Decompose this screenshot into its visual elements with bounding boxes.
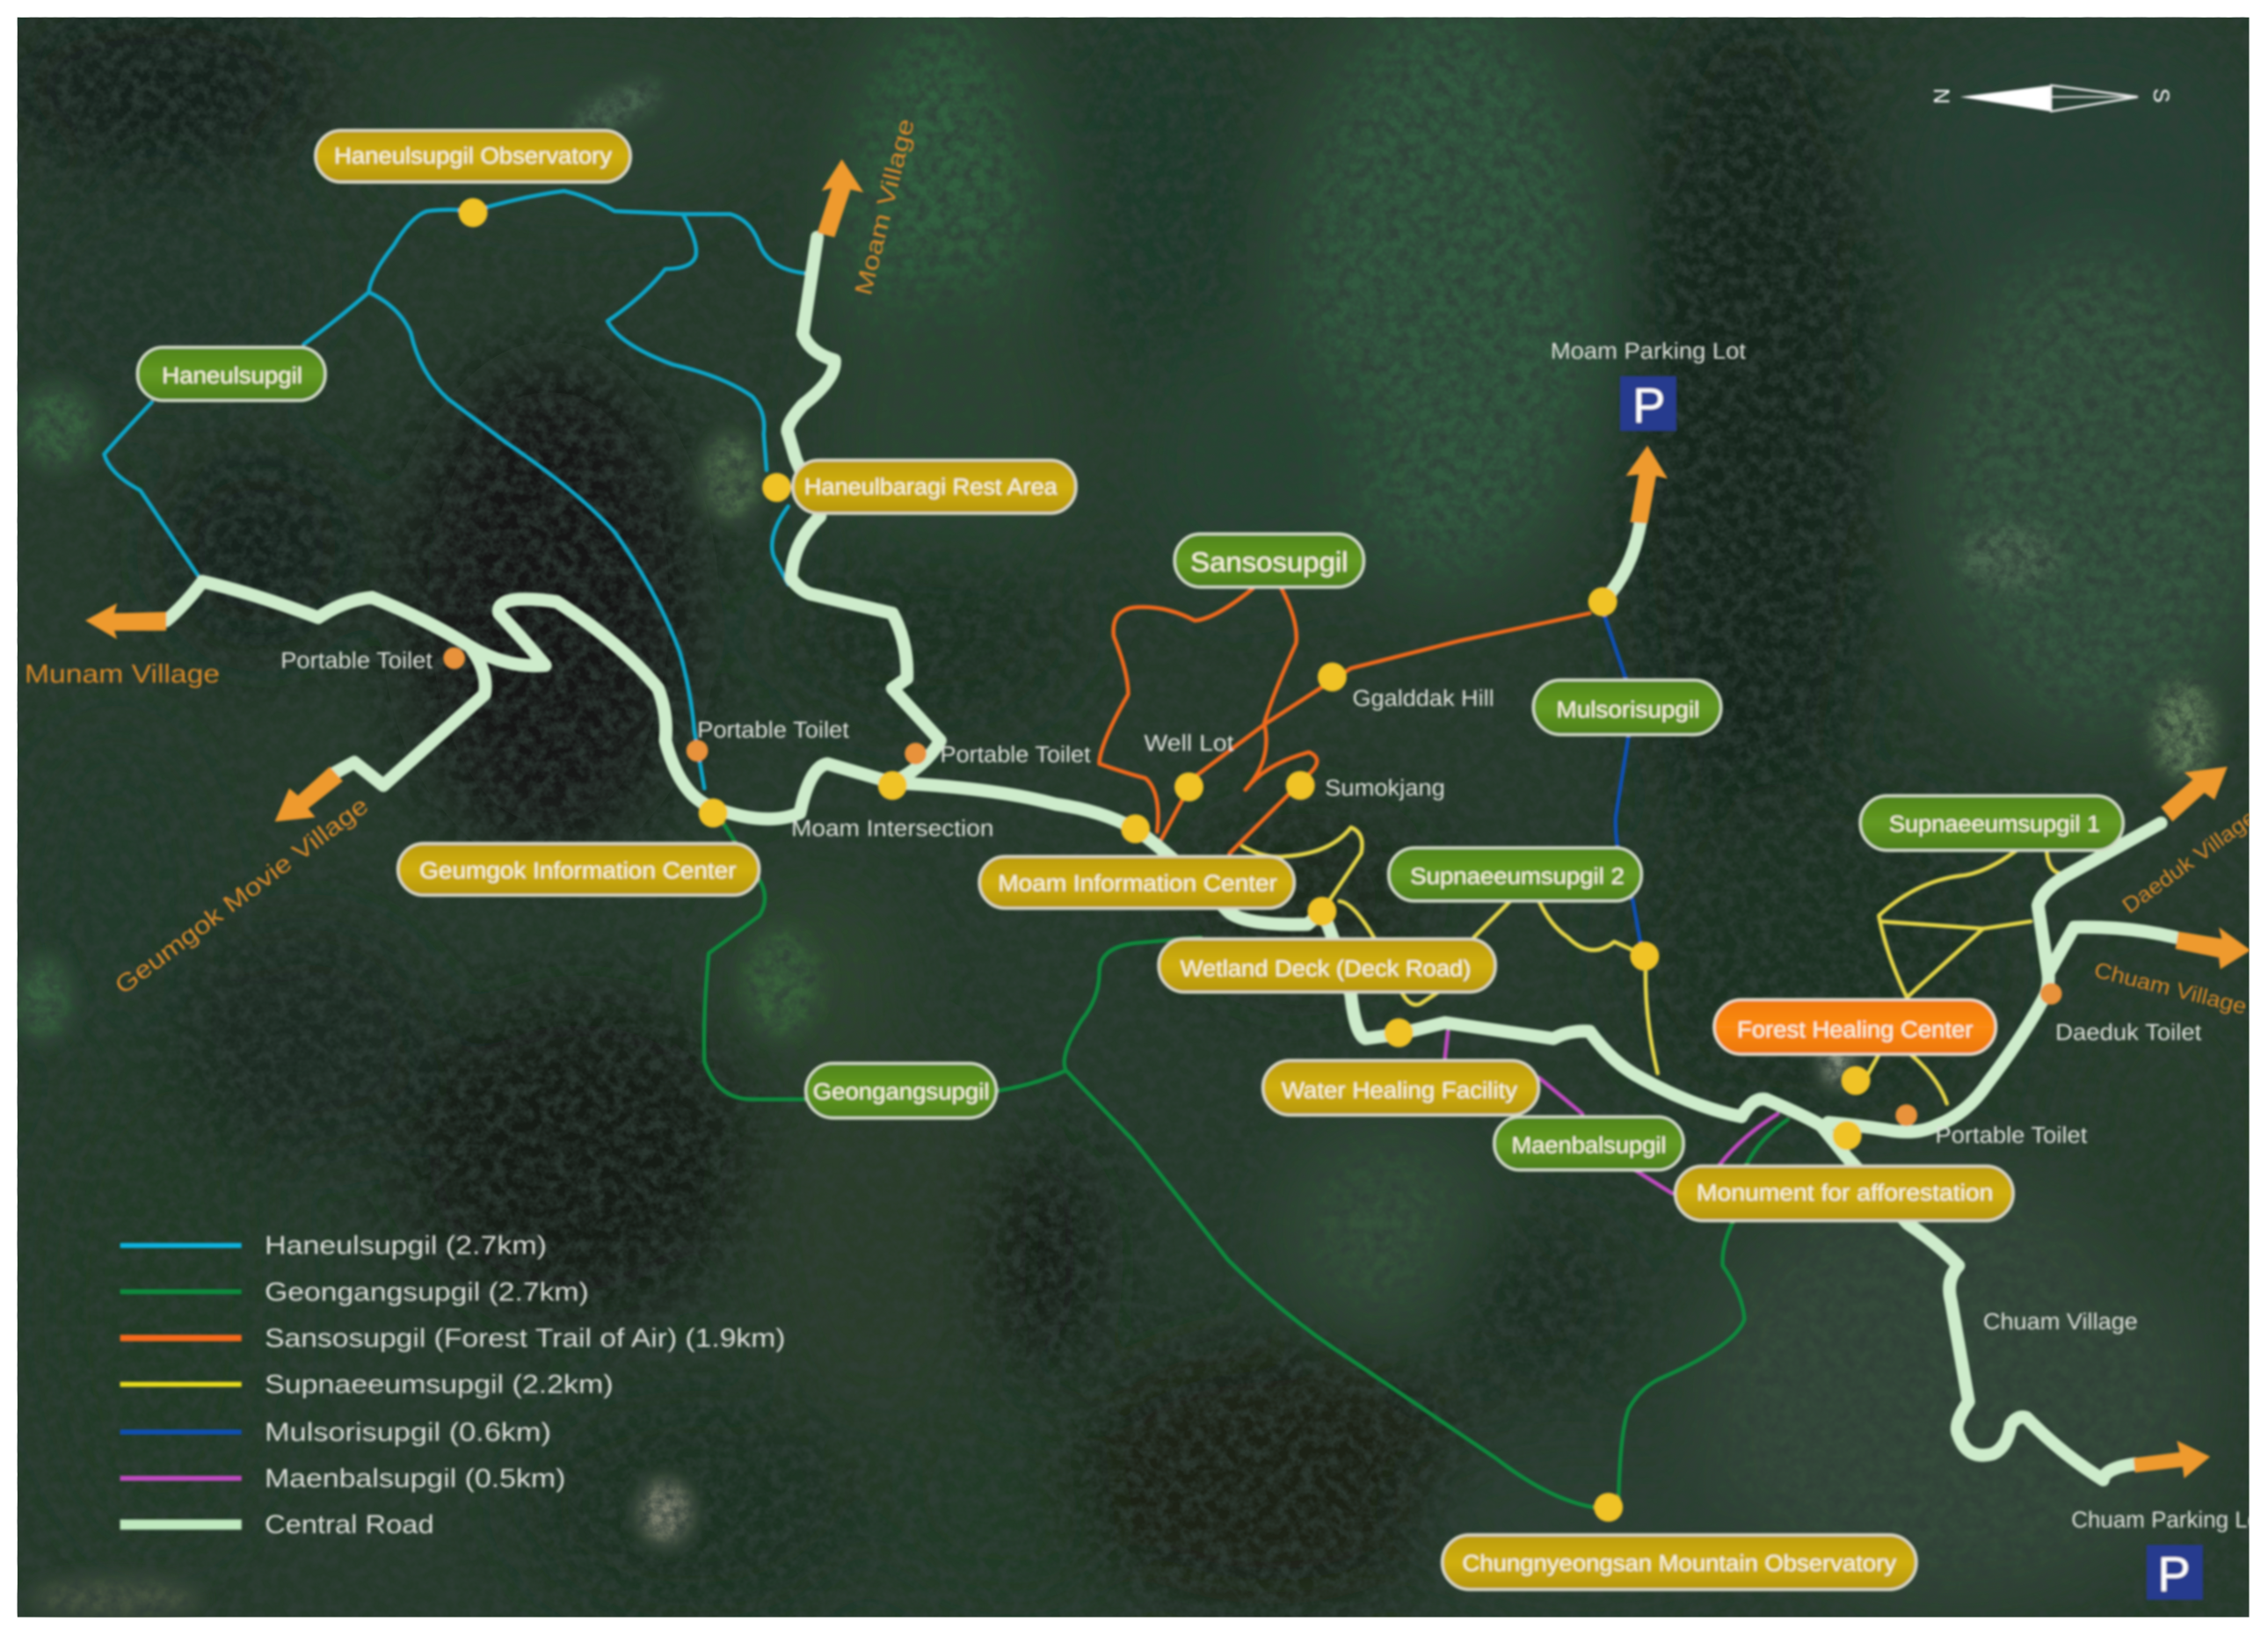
text: Portable Toilet east: Portable Toilet (1936, 1122, 2088, 1148)
label: Supnaeeumsupgil 2 (1389, 847, 1642, 901)
icon: compass: S (2148, 88, 2172, 103)
text: Daeduk Village: Daeduk Village (2119, 806, 2261, 919)
legend: Haneulsupgil: Haneulsupgil (2.7km) (265, 1232, 547, 1261)
trail: Supnaeeumsupgil (yellow) (1242, 827, 2066, 1103)
label: Mulsorisupgil: Mulsorisupgil (1556, 696, 1699, 723)
label: Supnaeeumsupgil 1: Supnaeeumsupgil 1 (1889, 811, 2100, 837)
label: Wetland Deck (Deck Road) (1159, 939, 1495, 993)
icon: Moam parking P (1620, 376, 1676, 433)
icon: Chuam parking P: P (2157, 1546, 2191, 1602)
arrow: Geumgok Movie Village (275, 767, 343, 822)
label: Sansosupgil: Sansosupgil (1190, 547, 1348, 578)
legend: Sansosupgil: Sansosupgil (Forest Trail of Air) (1.9km) (265, 1324, 785, 1353)
label: Geumgok Information Center (397, 843, 760, 896)
label: Supnaeeumsupgil 2: Supnaeeumsupgil 2 (1410, 862, 1625, 889)
label: Sansosupgil (1174, 534, 1364, 587)
text: Portable Toilet west: Portable Toilet (280, 647, 433, 673)
arrow: Munam Village (85, 603, 166, 639)
icon: compass: N (1929, 88, 1952, 104)
legend: Supnaeeumsupgil: Supnaeeumsupgil (2.2km) (265, 1371, 614, 1400)
text: Sumokjang: Sumokjang (1325, 774, 1445, 801)
label: Mulsorisupgil (1533, 680, 1721, 735)
legend: Mulsorisupgil: Mulsorisupgil (0.6km) (265, 1418, 551, 1447)
place markers: main points (459, 198, 1871, 1522)
arrow: Chuam Village (2176, 927, 2250, 969)
label: Maenbalsupgil (1494, 1116, 1683, 1170)
label: Haneulbaragi Rest Area (793, 460, 1076, 513)
label: Water Healing Facility: Water Healing Facility (1282, 1077, 1518, 1103)
text: Moam Intersection: Moam Intersection (791, 815, 993, 841)
text: Portable Toilet centre: Portable Toilet (697, 716, 850, 743)
label: Moam Information Center: Moam Information Center (998, 870, 1277, 897)
text: Portable Toilet Moam: Portable Toilet (941, 741, 1091, 767)
legend: Central Road: Central Road (265, 1510, 434, 1539)
arrow: Moam Parking Lot (1625, 446, 1668, 524)
label: Geongangsupgil: Geongangsupgil (813, 1079, 989, 1105)
label: Chungnyeongsan Mountain Observatory: Chungnyeongsan Mountain Observatory (1463, 1550, 1897, 1576)
legend: Geongangsupgil: Geongangsupgil (2.7km) (265, 1277, 589, 1306)
trail: Maenbalsupgil (purple) (1445, 1031, 1777, 1193)
text: Chuam Village orange: Chuam Village (2091, 958, 2249, 1019)
text: Chuam Parking Lot: Chuam Parking Lot (2071, 1507, 2267, 1533)
arrow: Chuam Parking Lot (2134, 1441, 2210, 1479)
text: Munam Village: Munam Village (25, 660, 220, 689)
text: Daeduk Toilet: Daeduk Toilet (2055, 1019, 2202, 1045)
text: Moam Parking Lot: Moam Parking Lot (1551, 338, 1747, 364)
trail: Haneulsupgil (light blue) (104, 191, 805, 789)
text: Well Lot: Well Lot (1145, 730, 1234, 756)
place markers: toilets (443, 647, 2062, 1126)
label: Chungnyeongsan Mountain Observatory (1442, 1535, 1916, 1589)
icon: Chuam parking P (2147, 1545, 2203, 1602)
label: Forest Healing Center (1714, 1000, 1996, 1055)
label: Monument for afforestation (1675, 1166, 2013, 1221)
label: Haneulsupgil Observatory (316, 130, 630, 182)
label: Geumgok Information Center: Geumgok Information Center (419, 857, 737, 883)
label: Haneulsupgil Observatory: Haneulsupgil Observatory (334, 142, 613, 169)
central road (166, 237, 2176, 1480)
arrow: Daeduk Village (2161, 767, 2228, 822)
label: Wetland Deck (Deck Road): Wetland Deck (Deck Road) (1181, 956, 1471, 982)
label: Monument for afforestation: Monument for afforestation (1697, 1180, 1993, 1206)
text: Ggalddak Hill: Ggalddak Hill (1352, 685, 1494, 711)
legend (120, 1232, 785, 1539)
label: Haneulsupgil: Haneulsupgil (162, 362, 302, 389)
label: Haneulbaragi Rest Area: Haneulbaragi Rest Area (804, 474, 1058, 500)
label: Haneulsupgil (137, 347, 325, 401)
label: Moam Information Center (979, 856, 1295, 908)
text: Geumgok Movie Village: Geumgok Movie Village (110, 791, 374, 1000)
label: Supnaeeumsupgil 1 (1860, 796, 2123, 851)
trail: Sansosupgil (orange) (1100, 589, 1589, 854)
trail: Mulsorisupgil (dark blue) (1604, 614, 1640, 942)
label: Water Healing Facility (1262, 1060, 1539, 1116)
arrow: Moam Village (818, 159, 863, 237)
legend: Maenbalsupgil: Maenbalsupgil (0.5km) (265, 1465, 565, 1494)
icon: Moam parking P: P (1632, 377, 1665, 433)
icon: compass (1929, 85, 2172, 112)
text: Chuam Village: Chuam Village (1983, 1308, 2138, 1334)
label: Geongangsupgil (805, 1063, 997, 1118)
trail: Geongangsupgil (green) (704, 823, 1788, 1509)
label: Forest Healing Center: Forest Healing Center (1737, 1016, 1974, 1043)
text: Moam Village: Moam Village (849, 116, 920, 298)
label: Maenbalsupgil: Maenbalsupgil (1511, 1131, 1667, 1158)
